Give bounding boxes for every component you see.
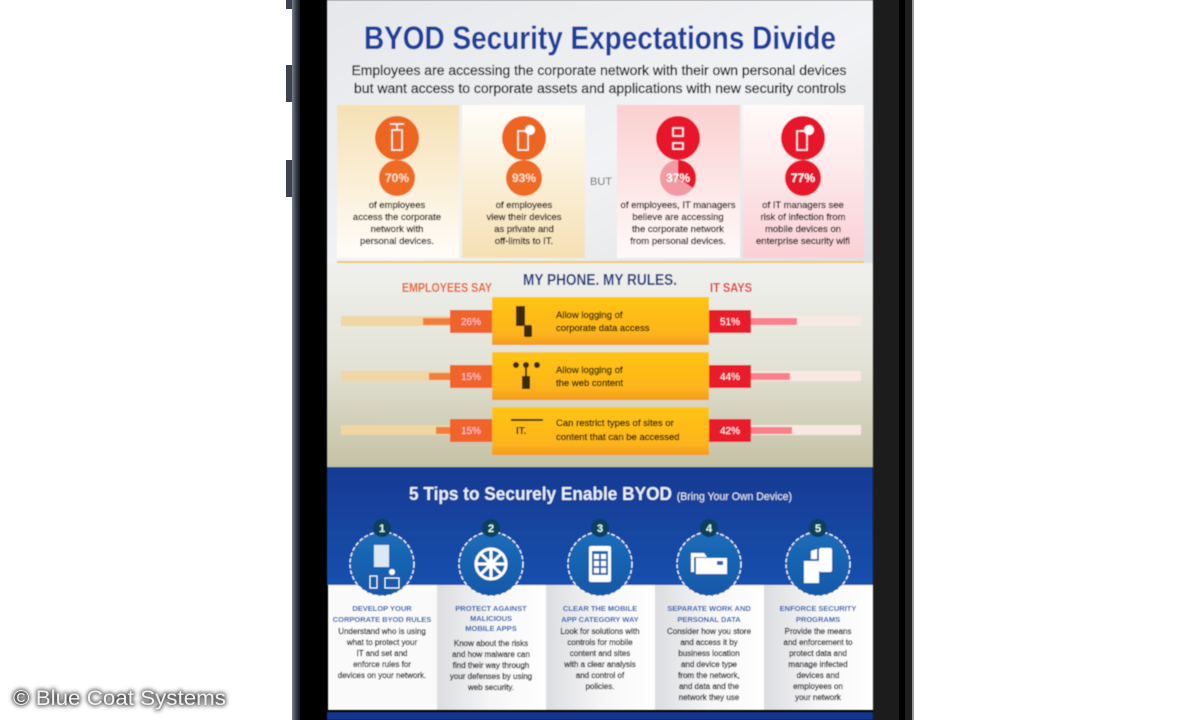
tip 4: and device type xyxy=(681,660,738,669)
tip 4: and data and the xyxy=(679,682,740,691)
row 1 xyxy=(341,297,861,345)
tip 3 xyxy=(546,519,655,710)
row 2: 44% xyxy=(720,372,740,383)
panel: stat 77%: enterprise security wifi xyxy=(756,236,850,247)
tip 3: with a clear analysis xyxy=(563,660,636,669)
row 2 xyxy=(341,352,861,400)
tip 5: employees on xyxy=(793,682,843,691)
label: employees say: EMPLOYEES SAY xyxy=(402,281,493,295)
row 2: the web content xyxy=(556,378,623,389)
panel: stat 77%: 77% xyxy=(791,171,815,185)
tip 1: 1 xyxy=(379,523,385,535)
tip 1: IT and set and xyxy=(356,649,408,658)
icon: browser window: IT. xyxy=(516,426,527,437)
tip 1: DEVELOP YOUR xyxy=(352,604,412,613)
intro text: but want access to corporate assets and applications with new security controls xyxy=(354,81,846,96)
tip 5: devices and xyxy=(797,671,839,680)
panel: stat 37%: the corporate network xyxy=(632,224,724,235)
icon: smartphone apps xyxy=(589,546,611,582)
tip 2: Know about the risks xyxy=(454,639,528,648)
row 2: Allow logging of xyxy=(556,365,623,376)
row 3: content that can be accessed xyxy=(556,432,680,443)
tip 3: controls for mobile xyxy=(567,638,633,647)
tip 2: your defenses by using xyxy=(450,672,532,681)
tip 2: web security. xyxy=(467,683,514,692)
row 3 xyxy=(341,407,861,455)
phone body xyxy=(286,0,914,720)
icon: blocked bug xyxy=(476,549,506,579)
tip 4: and access it by xyxy=(680,638,738,647)
tip 1: Understand who is using xyxy=(338,627,426,636)
label: it says: IT SAYS xyxy=(710,281,752,295)
tip 2: and how malware can xyxy=(452,650,530,659)
tip 4: network they use xyxy=(679,693,740,702)
icon: browser window xyxy=(511,419,543,437)
credit: © Blue Coat Systems xyxy=(13,687,226,710)
row 1: 26% xyxy=(461,317,481,328)
intro text: Employees are accessing the corporate network with their own personal devices xyxy=(352,63,847,78)
tip 3: content and sites xyxy=(570,649,630,658)
icon: phone xyxy=(390,124,404,150)
top panel background xyxy=(327,0,873,263)
panel: stat 37%: from personal devices. xyxy=(630,236,726,247)
icon: phone with badge xyxy=(518,125,535,150)
tip 4: from the network, xyxy=(678,671,740,680)
tip 5: manage infected xyxy=(788,660,848,669)
tip 3: CLEAR THE MOBILE xyxy=(563,604,637,613)
icon: phone and cable xyxy=(516,306,532,337)
row 3: 15% xyxy=(461,426,481,437)
tip 1: CORPORATE BYOD RULES xyxy=(333,615,431,624)
tip 3: 3 xyxy=(597,523,603,535)
tip 5 xyxy=(764,519,873,710)
panel: stat 70%: 70% xyxy=(385,171,409,185)
title: BYOD Security Expectations Divide xyxy=(364,20,836,56)
panel: stat 77%: risk of infection from xyxy=(760,212,846,223)
tip 5: Provide the means xyxy=(785,627,851,636)
tip 3: APP CATEGORY WAY xyxy=(561,615,639,624)
tip 4: Consider how you store xyxy=(667,627,752,636)
heading: MY PHONE. MY RULES. xyxy=(523,272,677,289)
panel: stat 93% xyxy=(462,105,585,258)
tip 2: 2 xyxy=(488,523,494,535)
panel: stat 93%: of employees xyxy=(496,200,552,211)
tip 5: 5 xyxy=(815,523,821,535)
tip 1: devices on your network. xyxy=(338,671,426,680)
tip 4: PERSONAL DATA xyxy=(677,615,741,624)
tip 5: your network xyxy=(795,693,842,702)
tip 5: and enforcement to xyxy=(784,638,853,647)
panel: stat 77%: mobile devices on xyxy=(765,224,841,235)
panel: stat 70%: access the corporate xyxy=(353,212,441,223)
panel: stat 37%: of employees, IT managers xyxy=(621,200,736,211)
panel: stat 37% xyxy=(617,105,740,258)
icon: pins and phone xyxy=(513,362,540,389)
credit: © Blue Coat Systems xyxy=(13,687,226,710)
intro text xyxy=(352,63,847,96)
panel: stat 70% xyxy=(337,105,459,258)
tip 3: Look for solutions with xyxy=(560,627,640,636)
bottom blue band xyxy=(327,712,873,720)
row 2: 15% xyxy=(461,372,481,383)
tip 5: protect data and xyxy=(789,649,847,658)
row 3: 42% xyxy=(720,426,740,437)
tip 2: find their way through xyxy=(453,661,529,670)
panel: stat 37%: believe are accessing xyxy=(632,212,724,223)
panel: stat 70%: network with xyxy=(371,224,423,235)
tip 2: MALICIOUS xyxy=(470,614,512,623)
tip 4: 4 xyxy=(706,523,713,535)
icon: checked documents xyxy=(804,548,832,583)
tip 2 xyxy=(437,519,546,710)
tip 4: SEPARATE WORK AND xyxy=(667,604,751,613)
panel: stat 77%: of IT managers see xyxy=(762,200,844,211)
icon: phone with alert xyxy=(797,125,814,150)
icon: devices xyxy=(370,545,399,588)
panel: stat 93%: view their devices xyxy=(487,212,562,223)
icon: phone blocked xyxy=(673,128,683,149)
row 1: corporate data access xyxy=(556,323,650,334)
tip 3: policies. xyxy=(586,682,614,691)
panel: stat 93%: 93% xyxy=(512,171,536,185)
label: but: BUT xyxy=(590,176,612,188)
heading: 5 tips: 5 Tips to Securely Enable BYOD (Bring Your Own Device) xyxy=(409,484,792,504)
tip 2: MOBILE APPS xyxy=(465,624,517,633)
row 1: Allow logging of xyxy=(556,310,623,321)
panel: stat 93%: off-limits to IT. xyxy=(495,236,553,247)
panel: stat 93%: as private and xyxy=(494,224,554,235)
panel: stat 37%: 37% xyxy=(666,171,690,185)
panel: stat 70%: of employees xyxy=(369,200,425,211)
panel: stat 77% xyxy=(743,105,864,258)
tip 4: business location xyxy=(678,649,740,658)
tip 1: enforce rules for xyxy=(353,660,411,669)
icon: folder and card xyxy=(691,553,727,574)
panel: tips header band xyxy=(327,467,873,585)
phone screen xyxy=(327,0,873,720)
tip 5: ENFORCE SECURITY xyxy=(780,604,856,613)
tip 5: PROGRAMS xyxy=(796,615,840,624)
tip 1 xyxy=(328,519,437,710)
row 1: 51% xyxy=(720,317,740,328)
panel: stat 70%: personal devices. xyxy=(360,236,434,247)
tip 4 xyxy=(655,519,764,710)
tip 2: PROTECT AGAINST xyxy=(455,604,527,613)
panel: my phone my rules xyxy=(327,261,873,467)
tip 1: what to protect your xyxy=(346,638,417,647)
row 3: Can restrict types of sites or xyxy=(556,418,674,429)
tip 3: and control of xyxy=(576,671,625,680)
